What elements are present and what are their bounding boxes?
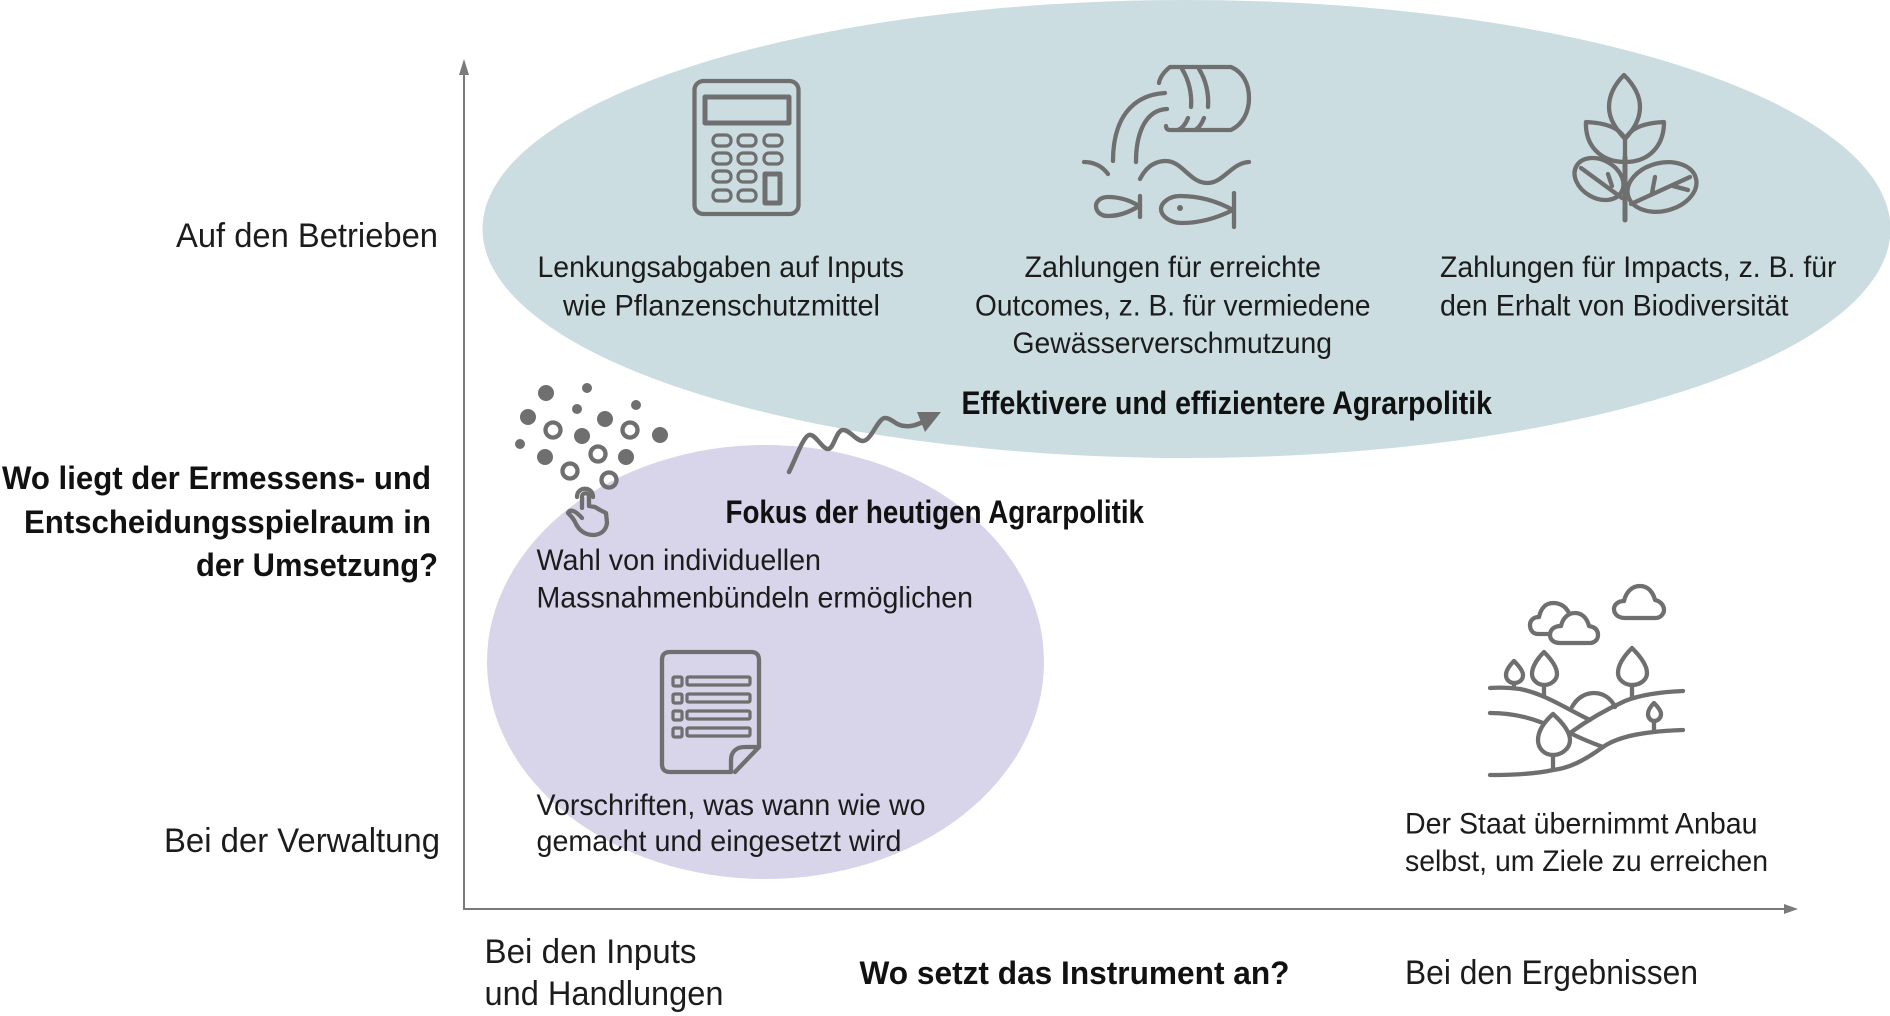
text: Zahlungen für Outcomes	[975, 251, 1370, 360]
heading: effective policy: Effektivere und effizientere Agrarpolitik	[962, 385, 1492, 421]
text: Vorschriften: gemacht und eingesetzt wird	[536, 825, 902, 858]
panel: purple ellipse, current policy focus	[487, 445, 1044, 879]
icon: pipe with pollution and fish	[1084, 67, 1249, 227]
text: Zahlungen für Impacts: den Erhalt von Biodiversität	[1440, 290, 1789, 322]
y-axis title: Entscheidungsspielraum in	[24, 504, 431, 540]
icon: plant with leaves	[1567, 75, 1702, 220]
x-axis label: right: Bei den Ergebnissen	[1405, 954, 1698, 992]
x-axis label: left: Bei den Inputs	[484, 933, 696, 971]
x-axis label: left: und Handlungen	[484, 975, 724, 1013]
icon: document with list	[662, 652, 759, 772]
text: Zahlungen für Impacts: Zahlungen für Impacts, z. B. für	[1440, 251, 1836, 284]
icon: landscape with hills, trees and clouds	[1490, 586, 1683, 775]
y-axis label: bottom: Bei der Verwaltung	[164, 822, 440, 860]
text: Der Staat: selbst, um Ziele zu erreichen	[1405, 845, 1768, 878]
y-axis title: der Umsetzung?	[196, 547, 438, 583]
arrow: squiggle towards effective policy	[789, 412, 941, 472]
y-axis title	[2, 460, 438, 583]
text: Wahl von Massnahmen: Wahl von individuellen	[536, 544, 821, 577]
text: Vorschriften: Vorschriften, was wann wie wo	[536, 789, 926, 822]
icon: calculator	[694, 81, 798, 214]
heading: current policy focus: Fokus der heutigen Agrarpolitik	[726, 494, 1144, 530]
y-axis label: top: Auf den Betrieben	[176, 217, 438, 255]
text: Zahlungen für Outcomes: Zahlungen für erreichte	[1024, 251, 1321, 284]
x-axis label: left	[484, 933, 724, 1013]
text: Lenkungsabgaben	[538, 251, 904, 322]
text: Vorschriften	[536, 789, 926, 858]
text: Zahlungen für Outcomes: Outcomes, z. B. für vermiedene	[975, 290, 1370, 322]
text: Der Staat: Der Staat übernimmt Anbau	[1405, 808, 1758, 840]
text: Zahlungen für Impacts	[1440, 251, 1836, 322]
text: Der Staat	[1405, 808, 1768, 878]
text: Wahl von Massnahmen: Massnahmenbündeln ermöglichen	[536, 582, 973, 614]
panel: teal ellipse, effective policy	[482, 0, 1890, 458]
text: Lenkungsabgaben: Lenkungsabgaben auf Inputs	[538, 251, 904, 284]
text: Wahl von Massnahmen	[536, 544, 973, 614]
icon: dots selection with pointing hand	[515, 383, 668, 535]
y-axis title: Wo liegt der Ermessens- und	[2, 460, 431, 496]
x-axis title: Wo setzt das Instrument an?	[860, 955, 1290, 991]
text: Zahlungen für Outcomes: Gewässerverschmutzung	[1012, 327, 1332, 360]
chart axes	[459, 59, 1798, 914]
text: Lenkungsabgaben: wie Pflanzenschutzmittel	[562, 290, 880, 322]
